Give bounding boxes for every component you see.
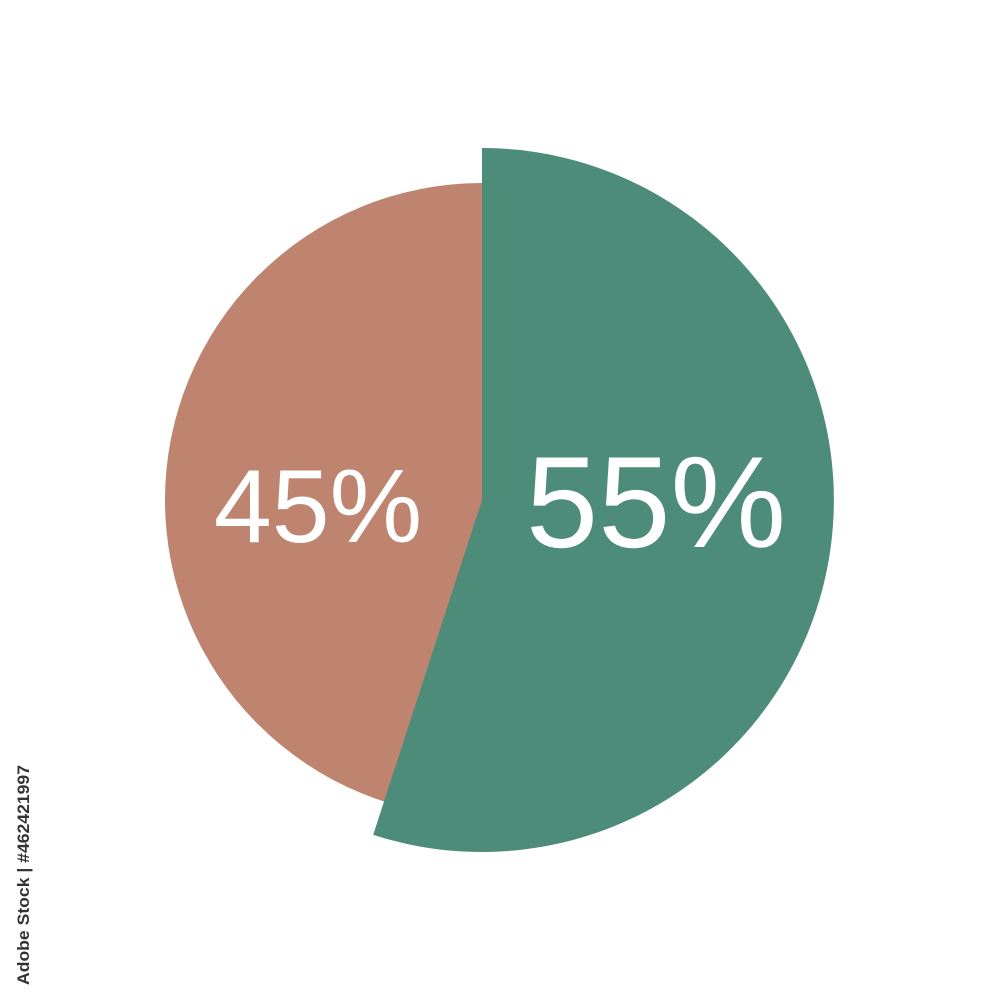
slice: 45% brown (165, 183, 799, 817)
label: 55%: 55% (526, 429, 786, 575)
watermark id text: Adobe Stock | #462421997 (14, 765, 33, 985)
slice: 55% green (373, 148, 834, 852)
label: 45%: 45% (214, 449, 422, 565)
